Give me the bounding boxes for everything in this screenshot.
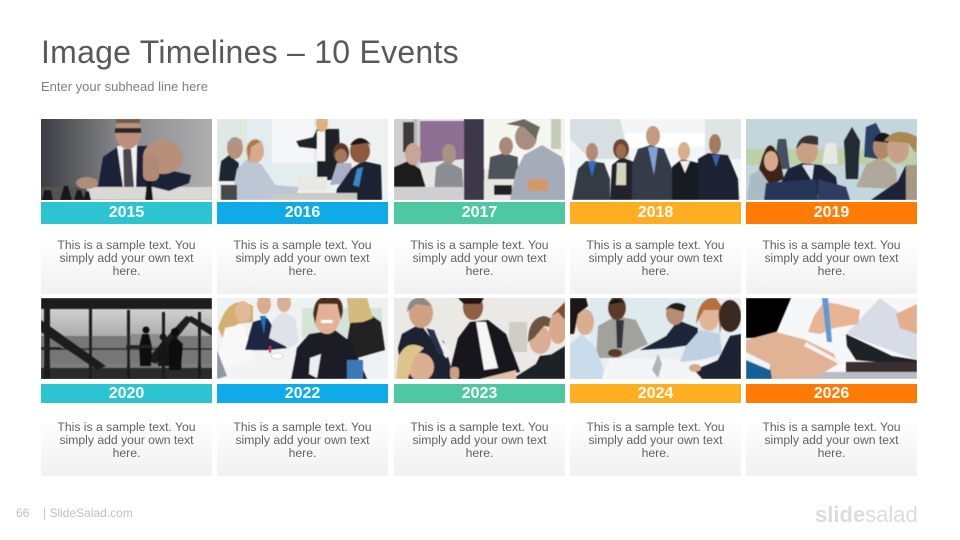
photo: smiling businesswoman at meeting	[217, 298, 388, 379]
photo: businessman playing chess	[41, 119, 212, 200]
photo: team around a meeting table	[570, 298, 741, 379]
text panel: This is a sample text. You simply add your own text here.	[586, 420, 725, 460]
text panel: This is a sample text. You simply add your own text here.	[233, 420, 372, 460]
text panel: This is a sample text. You simply add your own text here.	[586, 238, 725, 278]
title: Image Timelines – 10 Events	[41, 34, 459, 70]
event card: 2020	[41, 298, 212, 476]
text panel	[217, 403, 388, 476]
text panel: This is a sample text. You simply add your own text here.	[762, 238, 901, 278]
text panel	[570, 224, 741, 294]
year bar: 2018	[638, 204, 673, 221]
year bar	[41, 202, 212, 224]
text panel: This is a sample text. You simply add your own text here.	[233, 238, 372, 278]
text panel	[746, 403, 917, 476]
logo wordmark: slidesalad	[815, 502, 918, 527]
year bar	[217, 384, 388, 403]
year bar	[394, 384, 565, 403]
page number: 66	[16, 506, 29, 520]
year bar: 2016	[285, 204, 320, 221]
event card: 2018	[570, 119, 741, 294]
text panel	[394, 224, 565, 294]
text panel	[41, 224, 212, 294]
footer source: | SlideSalad.com	[43, 506, 133, 520]
event card: 2026	[746, 298, 917, 476]
photo: hands with pen and document	[746, 298, 917, 379]
year bar	[394, 202, 565, 224]
year bar	[746, 202, 917, 224]
year bar: 2024	[638, 385, 673, 402]
year bar: 2026	[814, 385, 849, 402]
year bar: 2015	[109, 204, 144, 221]
year bar: 2023	[462, 385, 497, 402]
event card: 2015	[41, 119, 212, 294]
event card: 2022	[217, 298, 388, 476]
photo: business handshake	[394, 298, 565, 379]
event card: 2023	[394, 298, 565, 476]
year bar	[570, 384, 741, 403]
event card: 2019	[746, 119, 917, 294]
text panel	[41, 403, 212, 476]
text panel	[746, 224, 917, 294]
year bar: 2019	[814, 204, 849, 221]
year bar	[746, 384, 917, 403]
photo: team meeting with presenter	[217, 119, 388, 200]
subhead: Enter your subhead line here	[41, 79, 208, 94]
photo: colleagues with a laptop	[746, 119, 917, 200]
year bar: 2017	[462, 204, 497, 221]
text panel: This is a sample text. You simply add your own text here.	[762, 420, 901, 460]
year bar: 2022	[285, 385, 320, 402]
year bar	[570, 202, 741, 224]
text panel: This is a sample text. You simply add your own text here.	[57, 420, 196, 460]
event card: 2016	[217, 119, 388, 294]
text panel: This is a sample text. You simply add your own text here.	[410, 238, 549, 278]
event card: 2017	[394, 119, 565, 294]
photo: office seen through glass	[394, 119, 565, 200]
year bar: 2020	[109, 385, 144, 402]
year bar	[217, 202, 388, 224]
text panel	[570, 403, 741, 476]
photo: silhouettes at city skyline window	[41, 298, 212, 379]
event card: 2024	[570, 298, 741, 476]
photo: five business people walking	[570, 119, 741, 200]
text panel: This is a sample text. You simply add your own text here.	[410, 420, 549, 460]
year bar	[41, 384, 212, 403]
text panel: This is a sample text. You simply add your own text here.	[57, 238, 196, 278]
text panel	[394, 403, 565, 476]
text panel	[217, 224, 388, 294]
